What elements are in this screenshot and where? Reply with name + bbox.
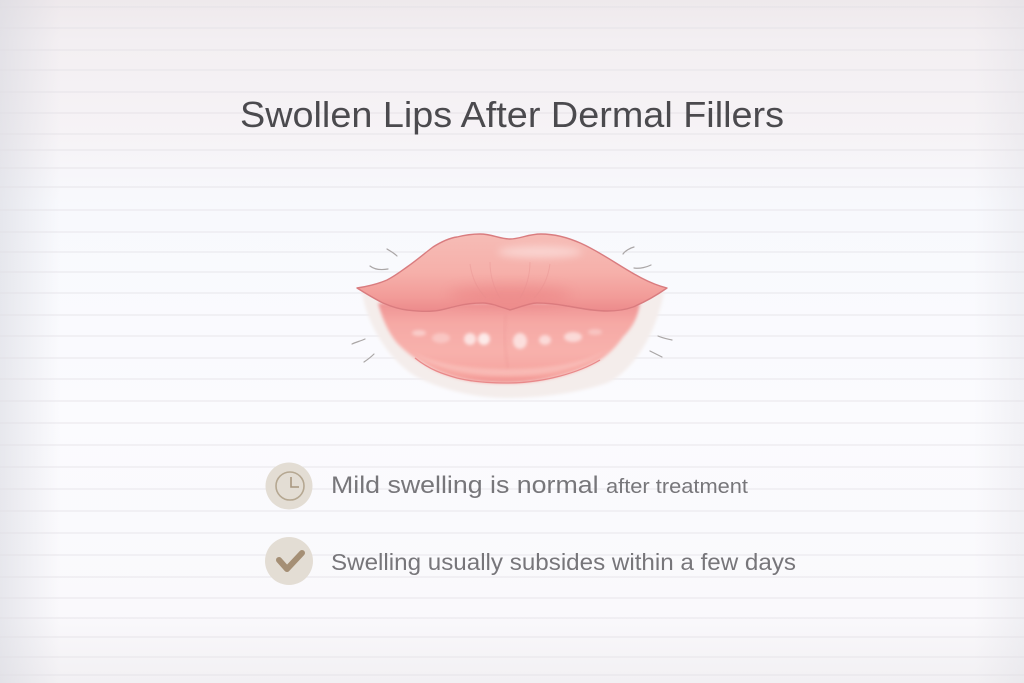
- halo around lips: [362, 292, 664, 398]
- swelling marks: [352, 247, 672, 362]
- lower lip highlights: [412, 329, 602, 349]
- icon: clock: [266, 462, 312, 510]
- illustration: swollen lips: [352, 234, 672, 398]
- lower lip central crease: [505, 314, 508, 368]
- list item: swelling subsides: [265, 537, 796, 585]
- icon: check mark: [265, 537, 313, 585]
- text: mild swelling is normal after treatment: Mild swelling is normal after treatment: [331, 472, 748, 499]
- text: swelling usually subsides: Swelling usually subsides within a few days: [331, 549, 796, 575]
- lower lip: [378, 303, 640, 383]
- title: Swollen Lips After Dermal Fillers: [240, 94, 784, 135]
- upper lip: [357, 234, 667, 311]
- list item: mild swelling: [266, 462, 748, 510]
